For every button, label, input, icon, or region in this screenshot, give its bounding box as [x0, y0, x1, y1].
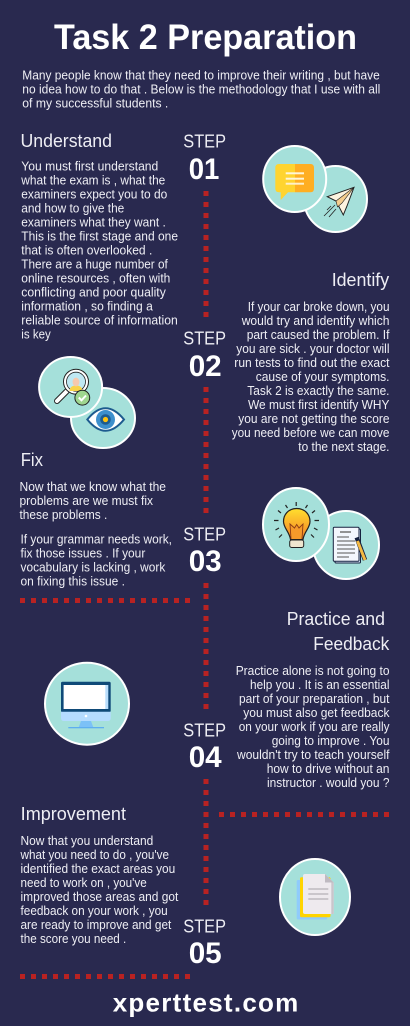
text block: understand body: There are a huge number of [21, 258, 168, 272]
text block: understand body: is key [21, 328, 51, 342]
text block: practice body: how to drive without an [267, 762, 390, 776]
text block: practice body: wouldn't try to teach yourself [236, 748, 390, 762]
text block: improvement body: identified the exact areas you [20, 862, 175, 876]
intro text: Many people know that they need to improve their writing , but have [22, 68, 380, 82]
text block: practice body: Practice alone is not going to [236, 664, 390, 678]
text block: understand body: reliable source of information [21, 314, 178, 328]
text block: fix body: Now that we know what the [20, 480, 166, 494]
text block: identify body: you need before we can move [232, 426, 390, 440]
step label 04 [183, 721, 226, 774]
icon: light bulb [263, 488, 329, 561]
panel: step 5 improvement [20, 804, 350, 970]
text block: identify body: would try and identify which [241, 314, 390, 328]
text block: improvement body: feedback on your work , you [20, 904, 168, 918]
heading: Practice and Feedback [287, 609, 390, 654]
text block: fix body: If your grammar needs work, [20, 532, 172, 546]
step label 04: STEP [183, 721, 226, 741]
text block: identify body: you are sick . your doctor will [236, 342, 390, 356]
title: Task 2 Preparation [54, 18, 357, 57]
text block: improvement body [20, 834, 179, 946]
icon: document and pencil [313, 511, 379, 579]
text block: identify body: Task 2 is exactly the same. [247, 384, 390, 398]
text block: identify body: part caused the problem. If [247, 328, 390, 342]
icon: paper plane [304, 166, 367, 232]
panel: step 4 practice and feedback [45, 609, 390, 790]
footer: website: xperttest.com [113, 988, 298, 1018]
text block: understand body: that is often overlooked . [21, 244, 152, 258]
step label 02: STEP [183, 329, 226, 349]
step label 03: STEP [183, 525, 226, 545]
heading: Practice and Feedback: Practice and [287, 609, 385, 629]
text block: identify body: to the next stage. [298, 440, 390, 454]
icon: stacked documents [280, 859, 350, 935]
heading: Fix: Fix [21, 450, 43, 470]
text block: understand body: and how to give the [21, 202, 124, 216]
icon: magnifier with person [39, 357, 102, 417]
icon: desktop monitor [45, 663, 129, 745]
text block: fix body: on fixing this issue . [20, 574, 125, 588]
text block: improvement body: the score you need . [20, 932, 126, 946]
step label 05 [183, 917, 226, 970]
text block: improvement body: need to work on , you've [20, 876, 147, 890]
text block: fix body: problems are we must fix [20, 494, 154, 508]
panel: step 2 identify [39, 270, 390, 454]
text block: improvement body: Now that you understand [20, 834, 153, 848]
text block: fix body: fix those issues . If your [20, 546, 145, 560]
text block: practice body: instructor . would you ? [267, 776, 390, 790]
text block: understand body: This is the first stage and one [21, 230, 178, 244]
step label 05: 05 [189, 937, 222, 970]
text block: practice body: part of your preparation , but [239, 692, 390, 706]
text block: practice body: help you . It is an essential [250, 678, 390, 692]
text block: identify body: We must first identify WHY [248, 398, 390, 412]
text block: understand body: examiners what they want . [21, 216, 166, 230]
heading: Identify: Identify [332, 270, 389, 290]
step label 02: 02 [189, 350, 222, 383]
text block: practice body [236, 664, 390, 790]
text block: fix body [20, 480, 172, 588]
text block: fix body: vocabulary is lacking , work [20, 560, 166, 574]
text block: understand body: online resources , often with [21, 272, 170, 286]
intro text [22, 68, 380, 110]
heading: Understand: Understand [20, 131, 112, 151]
text block: understand body: conflicting and poor quality [21, 286, 167, 300]
panel: step 1 understand [20, 131, 367, 342]
icon: chat bubble [263, 146, 326, 212]
icon: eye [71, 388, 135, 448]
text block: understand body [20, 160, 178, 342]
text block: identify body: run tests to find out the exact [234, 356, 390, 370]
text block: identify body: cause of your symptoms. [256, 370, 390, 384]
step label 01: 01 [189, 153, 219, 186]
step label 01: STEP [183, 132, 226, 152]
step label 05: STEP [183, 917, 226, 937]
text block: understand body: what the exam is , what the [20, 174, 165, 188]
step label 03: 03 [189, 545, 222, 578]
intro text: of my successful students . [22, 96, 168, 110]
step label 03 [183, 525, 226, 578]
text block: practice body: going to improve . You [272, 734, 390, 748]
text block: improvement body: improved those areas and got [20, 890, 179, 904]
text block: understand body: information , so finding a [21, 300, 153, 314]
text block: practice body: you must also get feedback [243, 706, 390, 720]
text block: identify body [232, 300, 390, 454]
heading: Practice and Feedback: Feedback [313, 634, 390, 654]
panel: step 3 fix [20, 450, 379, 588]
step label 04: 04 [189, 741, 222, 774]
intro text: no idea how to do that . Below is the methodology that I use with all [22, 82, 380, 96]
text block: understand body: examiners expect you to do [21, 188, 167, 202]
text block: understand body: You must first understand [21, 160, 158, 174]
text block: practice body: on your work if you are really [239, 720, 390, 734]
text block: identify body: If your car broke down, you [248, 300, 390, 314]
text block: fix body: these problems . [20, 508, 107, 522]
text block: improvement body: are ready to improve and get [20, 918, 172, 932]
text block: identify body: you are not getting the score [238, 412, 390, 426]
text block: improvement body: what you need to do , you've [20, 848, 169, 862]
heading: Improvement: Improvement [21, 804, 126, 824]
step label 01 [183, 132, 226, 186]
step label 02 [183, 329, 226, 383]
